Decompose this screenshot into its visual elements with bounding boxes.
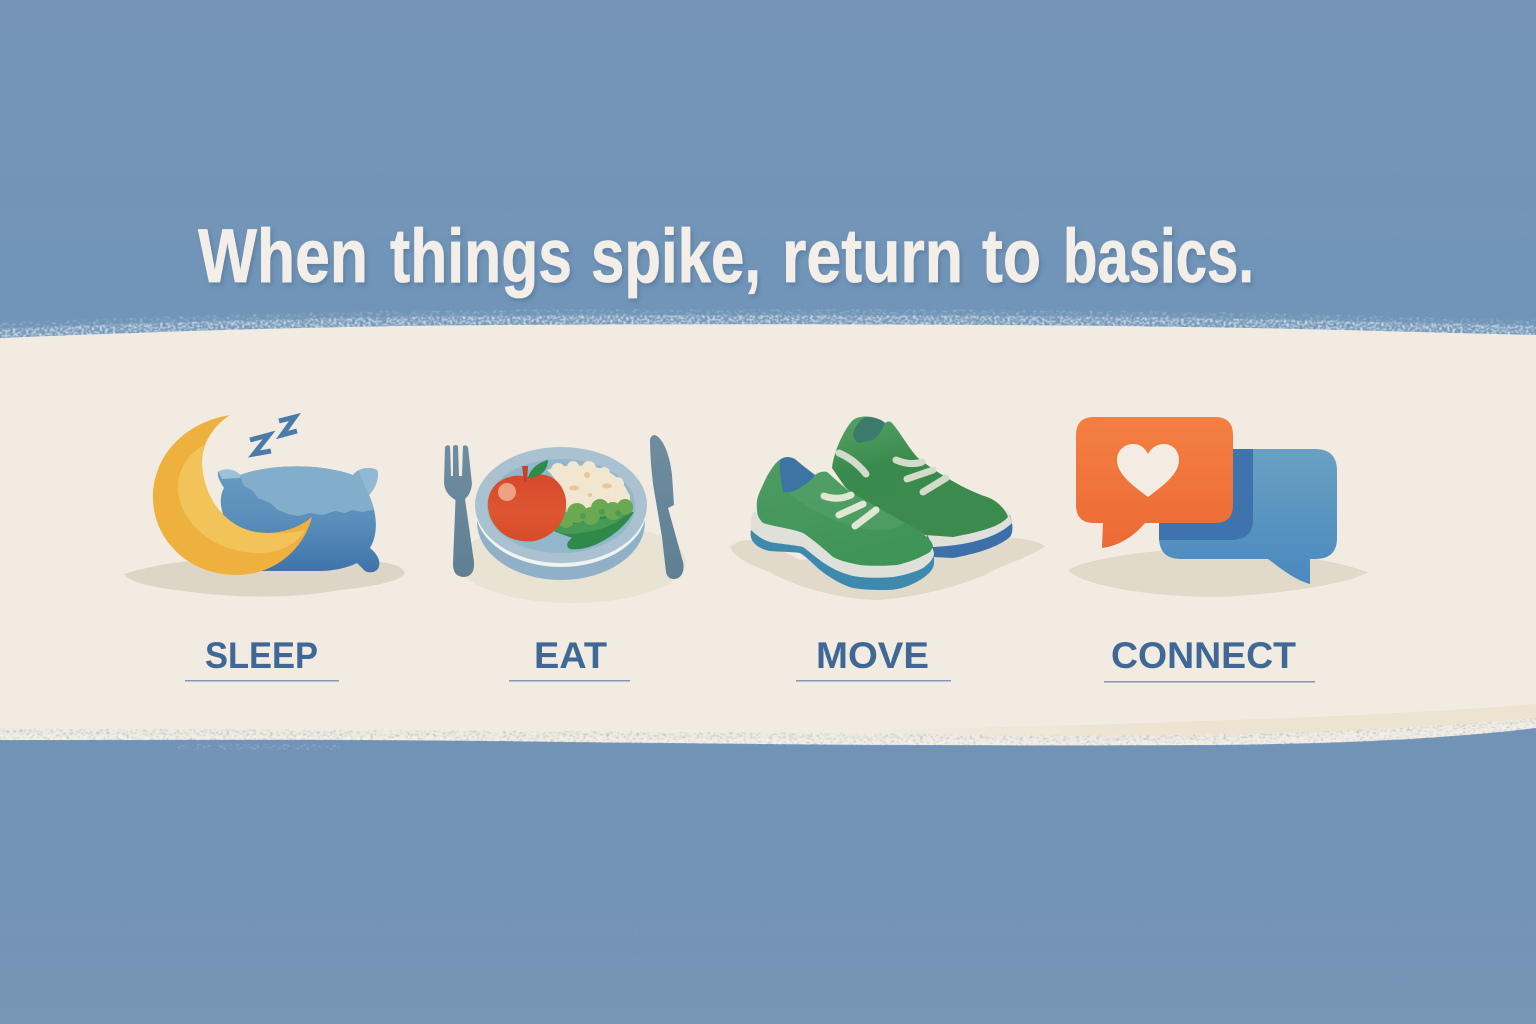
sleep z letters	[250, 417, 297, 454]
front shoe blue sole	[751, 522, 934, 590]
pillow ear tint	[218, 469, 240, 479]
icon group: sleep	[124, 415, 405, 597]
front shoe white sole	[751, 512, 934, 578]
moon	[153, 415, 312, 575]
infographic canvas	[0, 226, 1536, 750]
front shoe laces	[824, 495, 876, 526]
label: eat: EAT	[534, 635, 607, 676]
back shoe collar	[853, 417, 885, 443]
apple	[488, 474, 566, 541]
plate	[475, 447, 647, 580]
ground shadow: sleep	[124, 560, 405, 597]
title: When	[198, 214, 368, 299]
knife	[650, 435, 684, 579]
back shoe sole	[925, 515, 1012, 558]
ground shadow: move	[730, 538, 1045, 600]
front shoe	[751, 457, 934, 590]
blue speech bubble	[1159, 449, 1337, 584]
greens	[552, 499, 634, 549]
apple stem and leaf	[522, 460, 548, 482]
label: sleep: SLEEP	[205, 635, 318, 676]
title: basics.	[1063, 214, 1254, 299]
back shoe	[832, 417, 1012, 558]
heart	[1117, 444, 1179, 497]
icon group: move	[730, 417, 1045, 600]
icon group: eat	[444, 435, 686, 603]
label: connect: CONNECT	[1111, 635, 1296, 676]
back shoe upper	[832, 417, 1008, 537]
orange speech bubble	[1076, 417, 1233, 548]
front shoe heel	[780, 457, 815, 492]
cream band	[0, 309, 1536, 750]
ground shadow: connect	[1068, 548, 1368, 597]
front shoe upper	[757, 457, 933, 566]
rice	[547, 461, 630, 515]
title: return	[782, 214, 963, 299]
apple highlight	[498, 483, 516, 501]
ground shadow: eat	[458, 521, 686, 603]
title: spike,	[591, 214, 761, 299]
green leaves	[558, 499, 633, 528]
pillow	[218, 466, 380, 572]
moon highlight	[178, 445, 305, 553]
title: to	[982, 214, 1041, 299]
icon group: connect	[1068, 417, 1368, 597]
pillow light top	[240, 466, 378, 516]
label: move: MOVE	[816, 635, 929, 676]
label: eat	[509, 635, 630, 682]
green beans	[552, 512, 634, 549]
fork	[444, 445, 474, 577]
back shoe laces	[839, 453, 946, 492]
front shoe lighter toe panel	[790, 462, 905, 530]
title: things	[390, 214, 572, 299]
rice specks	[569, 472, 612, 497]
